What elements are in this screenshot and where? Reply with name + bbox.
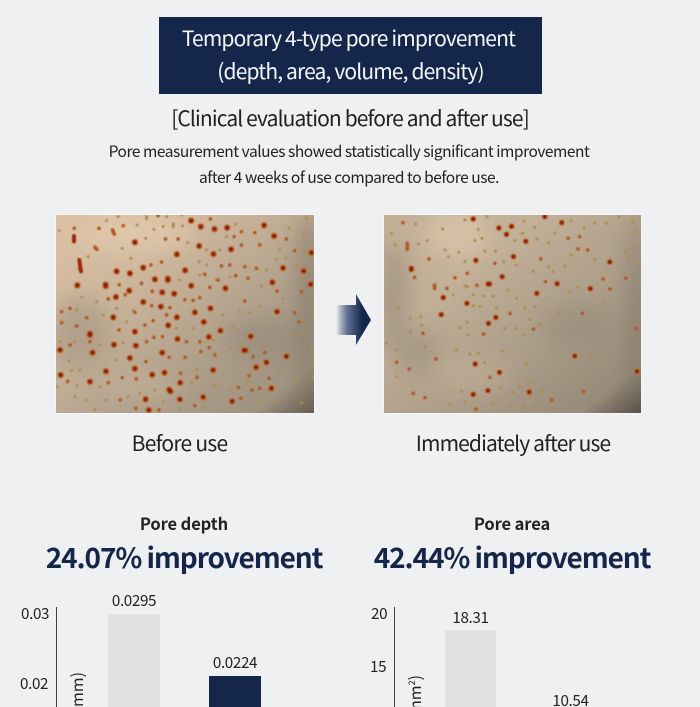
y axis label: ) xyxy=(402,675,426,680)
title banner: (depth, area, volume, density) xyxy=(217,56,484,86)
bar: after 0.0224 xyxy=(209,676,261,707)
stat: pore area improvement: 42.44% improvement xyxy=(374,537,650,577)
value 0.0224: 0.0224 xyxy=(213,651,257,673)
heading: pore depth: Pore depth xyxy=(140,511,228,535)
subtitle: [Clinical evaluation before and after use] xyxy=(171,103,529,133)
y axis label: 2 xyxy=(405,680,418,685)
y tick 20: 20 xyxy=(371,602,387,624)
heading: pore area: Pore area xyxy=(474,511,550,535)
arrow: before to after xyxy=(336,294,371,345)
value 18.31: 18.31 xyxy=(452,606,489,628)
photo: skin before use xyxy=(56,215,314,413)
y tick 0.02: 0.02 xyxy=(20,672,48,694)
y axis line xyxy=(394,607,395,707)
y tick 0.03: 0.03 xyxy=(21,602,49,624)
y axis line xyxy=(56,607,57,707)
description text: after 4 weeks of use compared to before use. xyxy=(199,166,499,188)
caption: before use: Before use xyxy=(132,428,227,458)
title banner: Temporary 4-type pore improvement xyxy=(182,23,515,53)
title banner xyxy=(159,17,542,94)
stat: pore depth improvement: 24.07% improvement xyxy=(46,537,322,577)
bar: before 0.0295 xyxy=(108,614,160,707)
caption: immediately after use: Immediately after use xyxy=(416,428,610,458)
description text xyxy=(109,140,590,188)
y tick 15: 15 xyxy=(370,655,386,677)
y axis label xyxy=(402,675,426,707)
chart: pore area xyxy=(370,602,589,707)
bar: before 18.31 xyxy=(445,630,496,707)
chart: pore depth xyxy=(20,590,261,707)
description text: Pore measurement values showed statistically significant improvement xyxy=(109,140,589,162)
photo: skin after use xyxy=(384,215,641,413)
